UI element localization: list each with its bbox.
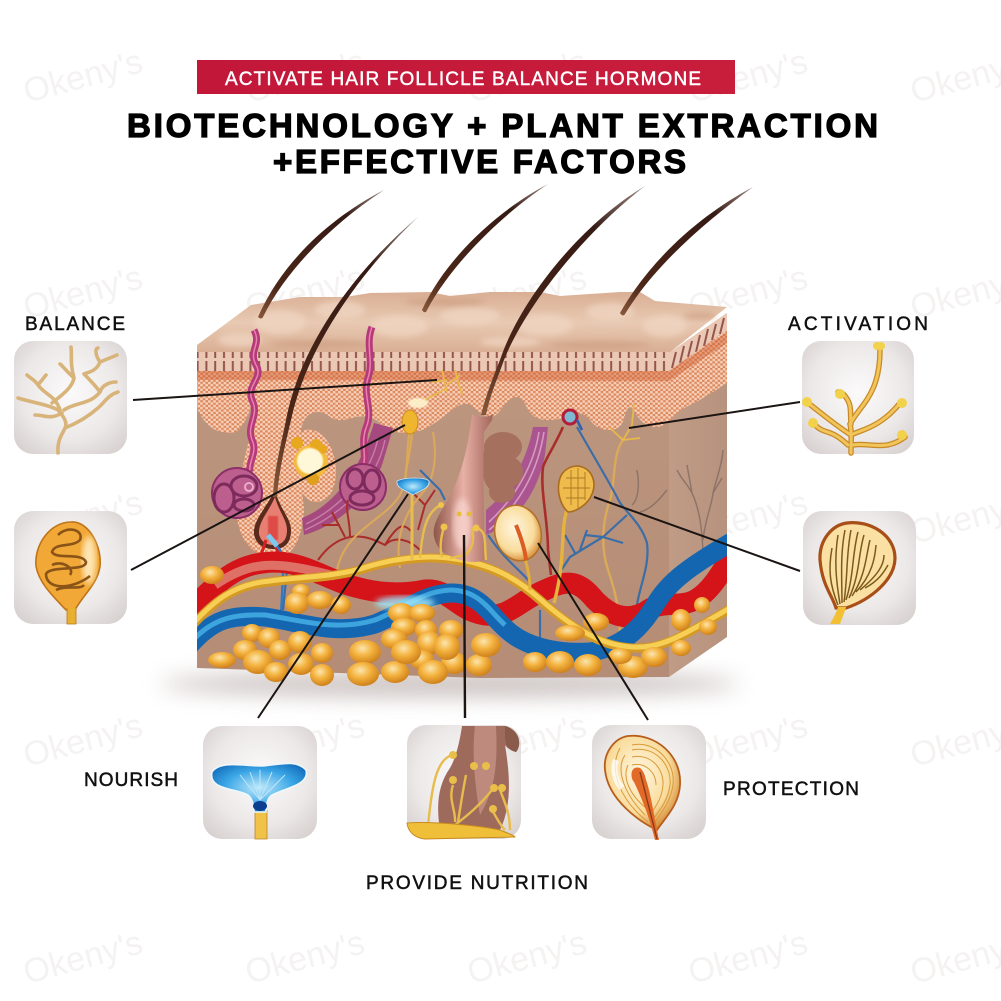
sebaceous lobes: [482, 432, 523, 503]
nerve fibres thin: [337, 430, 623, 640]
fat cells: [200, 566, 717, 686]
epidermis cells: [197, 330, 727, 556]
leader lines: [131, 380, 800, 720]
right muscle: [486, 427, 548, 535]
basal darker band: [197, 332, 727, 381]
watermarks: Okeny's: [684, 259, 812, 327]
banner: ACTIVATE HAIR FOLLICLE BALANCE HORMONE: [225, 69, 701, 90]
sweat gland left: [212, 330, 262, 518]
main hair follicle: [420, 414, 523, 562]
watermarks: Okeny's: [19, 484, 147, 552]
card: activation, free nerve endings: [802, 341, 914, 454]
card: coiled corpuscle: [14, 511, 127, 624]
grey vessels right: [632, 450, 723, 552]
Pacinian corpuscle: [489, 500, 547, 590]
banner: [197, 60, 735, 94]
card: ruffini corpuscle: [803, 511, 916, 625]
watermarks: Okeny's: [684, 924, 812, 992]
title: BIOTECHNOLOGY + PLANT EXTRACTION: [127, 107, 878, 144]
watermarks: Okeny's: [463, 707, 591, 775]
watermarks: Okeny's: [463, 924, 591, 992]
follicle nerve endings: [420, 505, 486, 560]
label: balance: BALANCE: [25, 314, 125, 335]
card: nourish, blue bulb: [203, 726, 317, 839]
Meissner corpuscle: [402, 410, 418, 480]
title: +EFFECTIVE FACTORS: [273, 143, 686, 180]
watermarks: Okeny's: [19, 259, 147, 327]
watermarks: Okeny's: [19, 707, 147, 775]
watermarks: Okeny's: [463, 259, 591, 327]
watermarks: Okeny's: [19, 924, 147, 992]
sweat gland right: [340, 327, 386, 510]
ring sensory ending: [563, 410, 582, 430]
label: provide nutrition: PROVIDE NUTRITION: [366, 873, 588, 894]
watermarks: Okeny's: [241, 924, 369, 992]
Ruffini corpuscle: [554, 466, 594, 603]
red artery: [190, 550, 735, 617]
watermarks: Okeny's: [241, 707, 369, 775]
skin cross-section diagram: [160, 184, 753, 697]
skin top surface: [197, 292, 727, 353]
front face: [197, 350, 669, 678]
watermarks: Okeny's: [684, 707, 812, 775]
right side face: [669, 313, 727, 677]
card: provide nutrition, follicle base: [407, 725, 521, 839]
watermarks: Okeny's: [463, 43, 591, 111]
free nerve ending top: [425, 370, 640, 440]
label: activation: ACTIVATION: [788, 314, 928, 335]
hair strands: [258, 184, 753, 497]
cell ring around gold gland: [295, 430, 336, 502]
yellow nerve: [190, 557, 735, 648]
title: [127, 107, 878, 180]
card: balance, branching nerve: [14, 341, 127, 454]
watermarks: Okeny's: [19, 43, 147, 111]
blue thin vessels: [283, 427, 648, 640]
left muscle: [302, 423, 393, 535]
ground shadow: [160, 671, 740, 697]
blue bulb: [397, 478, 429, 560]
left follicle bulb: [254, 490, 291, 615]
watermarks: Okeny's: [241, 43, 369, 111]
watermarks: Okeny's: [684, 43, 812, 111]
sebaceous gold cluster: [291, 437, 328, 485]
label: protection: PROTECTION: [723, 779, 859, 800]
label: nourish: NOURISH: [84, 770, 178, 791]
card: protection, pacinian corpuscle: [592, 725, 706, 840]
membrane ticks: [197, 313, 727, 371]
red capillaries: [318, 427, 563, 575]
blue vein: [190, 540, 735, 652]
watermarks: Okeny's: [684, 484, 812, 552]
vessels: [190, 540, 735, 652]
watermarks: Okeny's: [241, 259, 369, 327]
